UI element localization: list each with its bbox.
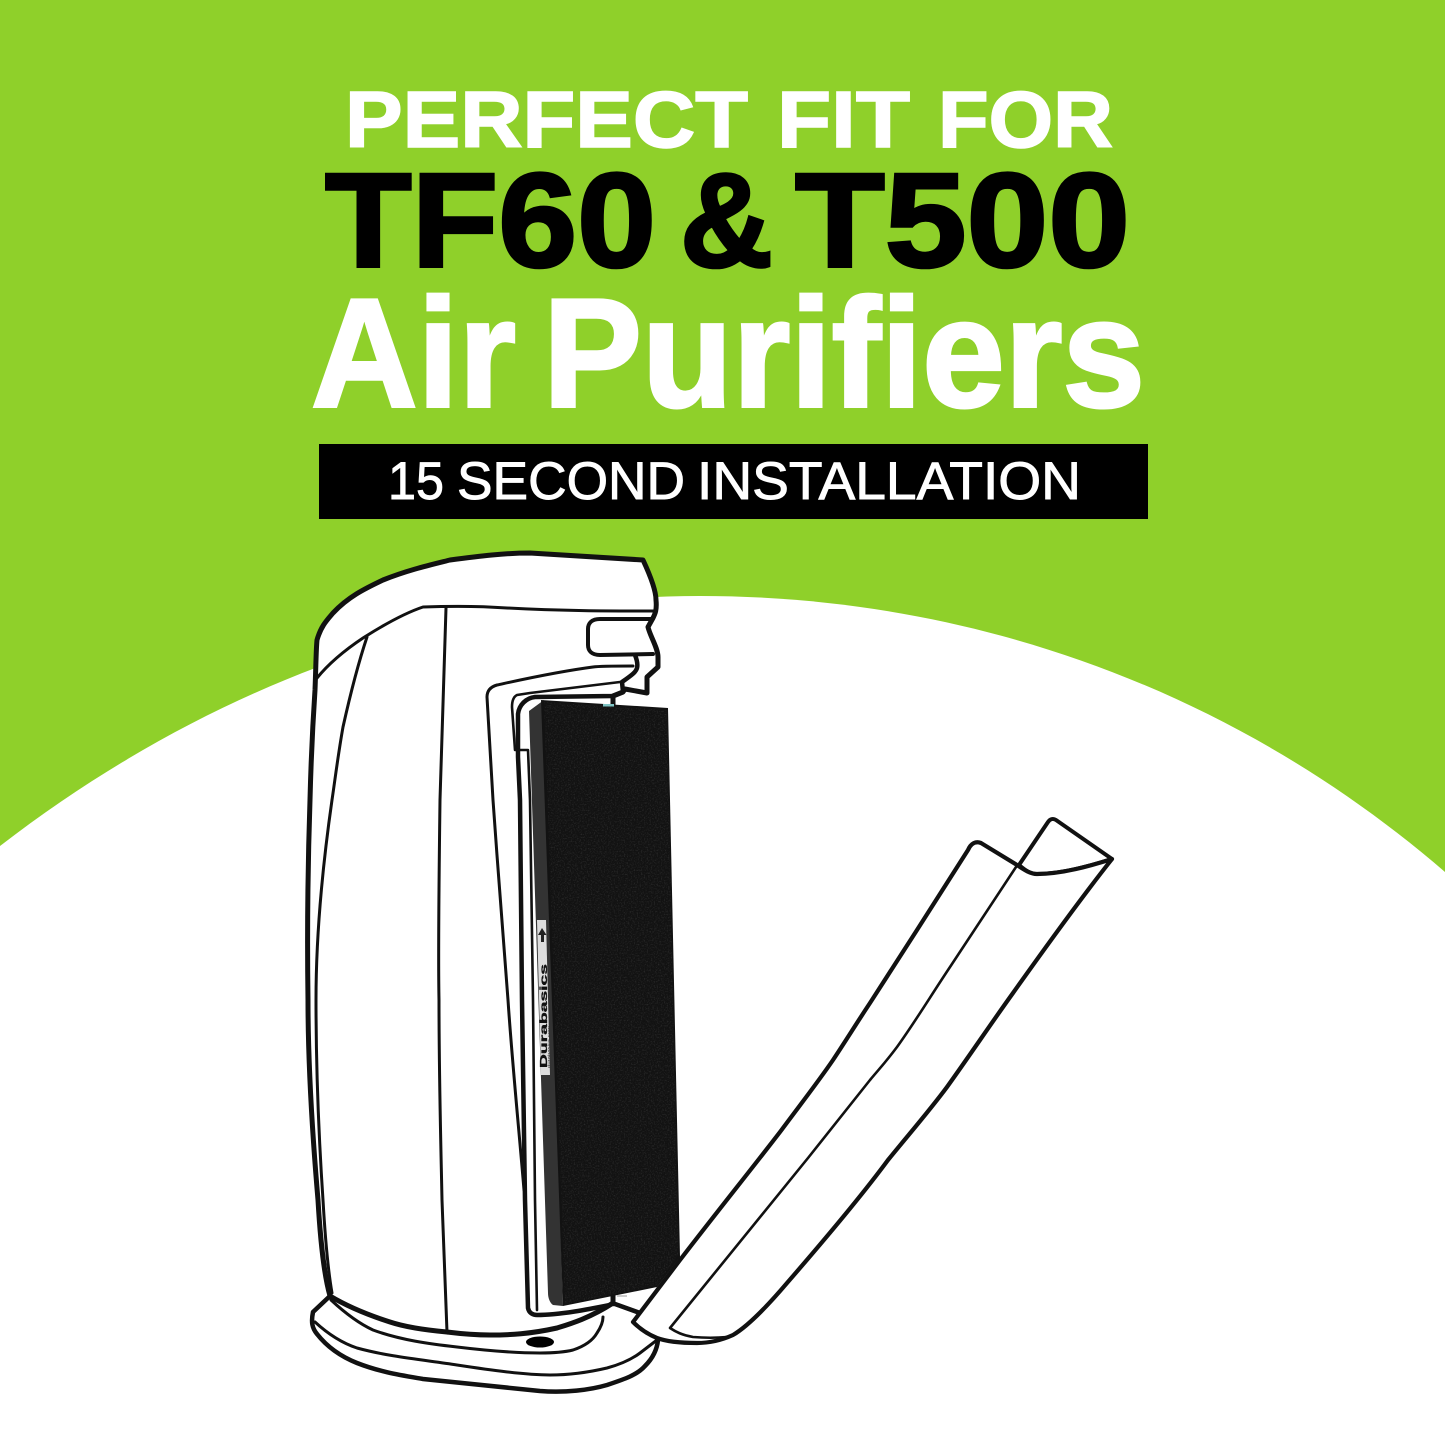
heading: perfect fit for xyxy=(345,75,1113,164)
heading: air purifiers: Purifiers xyxy=(543,266,1145,440)
door opening lines xyxy=(518,655,637,1315)
heading: air purifiers: Air xyxy=(311,266,516,440)
label arrow xyxy=(538,928,546,942)
banner text: 15 xyxy=(388,452,444,511)
banner text: INSTALLATION xyxy=(697,452,1081,511)
body inner lines xyxy=(317,606,653,678)
door outline xyxy=(633,842,1112,1343)
heading: air purifiers xyxy=(311,266,1145,440)
heading: model names: T500 xyxy=(795,146,1130,296)
installation banner xyxy=(319,444,1148,519)
filter face xyxy=(541,700,680,1306)
filter top tab xyxy=(603,704,614,706)
door rear fold xyxy=(1019,819,1112,874)
white arc background xyxy=(0,596,1445,1445)
heading: perfect fit for: FIT xyxy=(777,75,910,164)
filter label xyxy=(537,920,551,1075)
air purifier illustration xyxy=(308,553,658,1392)
banner text: SECOND xyxy=(457,452,685,511)
banner text xyxy=(388,452,1081,511)
heading: model names: TF60 xyxy=(325,146,656,296)
base contour lines xyxy=(331,1300,603,1353)
label website text: durabasics.com xyxy=(547,1026,551,1068)
open door panel xyxy=(633,819,1112,1343)
base hole xyxy=(526,1336,554,1348)
base xyxy=(312,1296,658,1392)
handle recess xyxy=(588,619,653,655)
filter texture xyxy=(544,702,678,1304)
door inner line xyxy=(670,867,1016,1338)
filter xyxy=(529,700,680,1306)
heading: model names: & xyxy=(680,146,773,296)
purifier body xyxy=(308,553,658,1335)
label brand text: Durabasics xyxy=(539,963,550,1068)
heading: perfect fit for: PERFECT xyxy=(345,75,748,164)
heading: model names xyxy=(325,146,1130,296)
filter bottom tab xyxy=(617,1295,627,1297)
heading: perfect fit for: FOR xyxy=(938,75,1113,164)
filter side edge xyxy=(529,700,563,1306)
